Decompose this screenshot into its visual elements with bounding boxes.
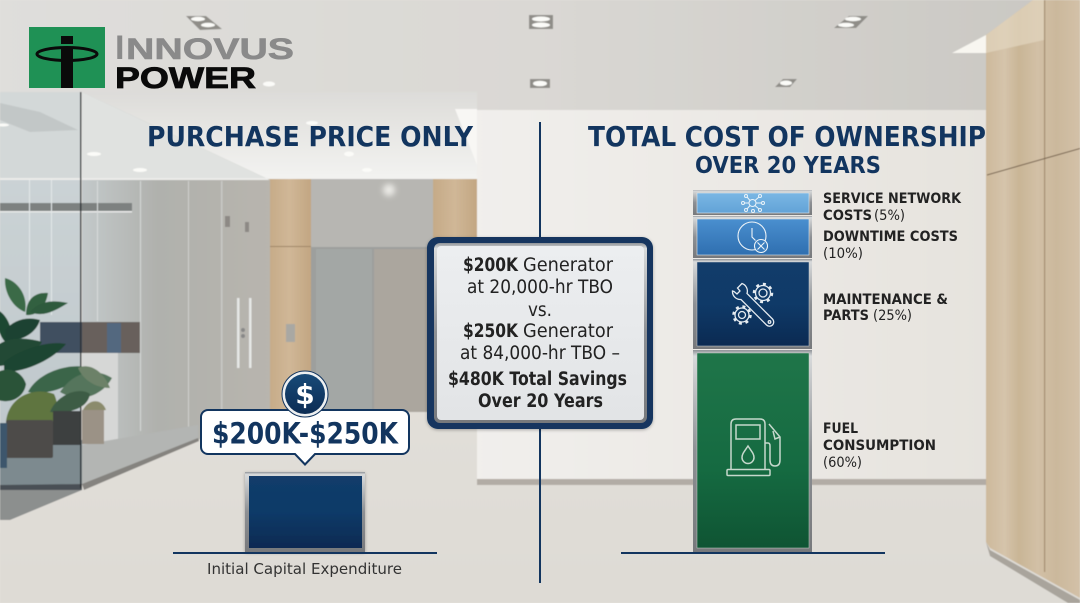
label: downtime costs: DOWNTIME COSTS bbox=[823, 229, 958, 245]
logo wordmark: NNOVUS bbox=[126, 33, 294, 66]
label: downtime costs: (10%) bbox=[823, 246, 863, 262]
savings text: vs. bbox=[528, 300, 552, 321]
label: service network costs: COSTS bbox=[823, 208, 872, 224]
icon: wrench and gears bbox=[732, 284, 774, 326]
logo wordmark: I bbox=[115, 29, 124, 67]
savings text: Generator bbox=[523, 321, 613, 342]
reception desk bbox=[40, 322, 140, 353]
plants bbox=[0, 278, 112, 422]
label: maintenance and parts: MAINTENANCE & bbox=[823, 292, 948, 308]
label: maintenance and parts: (25%) bbox=[873, 308, 912, 324]
price callout bbox=[201, 410, 409, 464]
label: maintenance and parts: PARTS bbox=[823, 308, 869, 324]
label: fuel consumption bbox=[823, 421, 936, 471]
heading: total cost of ownership: TOTAL COST OF OWNERSHIP bbox=[588, 121, 986, 153]
icon: dollar badge bbox=[282, 371, 328, 417]
label: service network costs: (5%) bbox=[874, 208, 905, 224]
logo wordmark bbox=[115, 29, 294, 95]
label: service network costs bbox=[823, 191, 962, 224]
heading: purchase price only: PURCHASE PRICE ONLY bbox=[147, 121, 474, 153]
bar caption: Initial Capital Expenditure bbox=[207, 560, 402, 578]
divider line bbox=[539, 122, 541, 583]
icon: network bbox=[742, 194, 764, 212]
bar: initial capital expenditure bbox=[245, 472, 365, 552]
savings text: $250K bbox=[463, 321, 519, 342]
savings text: at 84,000-hr TBO – bbox=[460, 343, 620, 364]
heading: total cost of ownership: OVER 20 YEARS bbox=[695, 153, 881, 179]
icon: fuel pump bbox=[727, 419, 780, 476]
ceiling lights bbox=[186, 15, 868, 88]
label: maintenance and parts bbox=[823, 292, 948, 324]
label: fuel consumption: (60%) bbox=[823, 455, 862, 471]
logo mark bbox=[29, 27, 105, 88]
savings text bbox=[448, 255, 627, 412]
segment: downtime costs bbox=[693, 216, 812, 258]
segment: maintenance and parts bbox=[693, 259, 812, 349]
label: service network costs: SERVICE NETWORK bbox=[823, 191, 962, 207]
heading: total cost of ownership bbox=[588, 121, 986, 179]
icon: dollar badge: $ bbox=[295, 378, 315, 411]
savings text: at 20,000-hr TBO bbox=[467, 277, 613, 298]
logo wordmark: POWER bbox=[115, 62, 256, 95]
panel: savings comparison bbox=[427, 237, 653, 429]
segment: service network costs bbox=[693, 190, 812, 215]
savings text: Generator bbox=[523, 255, 613, 276]
savings text: $480K Total Savings bbox=[448, 369, 627, 390]
label: downtime costs bbox=[823, 229, 958, 262]
right wood wall bbox=[986, 542, 1080, 603]
icon: clock with x bbox=[738, 222, 768, 252]
label: fuel consumption: CONSUMPTION bbox=[823, 438, 936, 454]
panel: purchase price bar bbox=[173, 472, 437, 578]
savings text: $200K bbox=[463, 255, 519, 276]
price callout: $200K-$250K bbox=[212, 416, 399, 450]
savings text: Over 20 Years bbox=[478, 391, 603, 412]
label: fuel consumption: FUEL bbox=[823, 421, 858, 437]
segment: fuel consumption bbox=[693, 350, 812, 552]
logo: Innovus Power bbox=[29, 27, 294, 95]
chart: total cost of ownership stack bbox=[621, 190, 885, 554]
